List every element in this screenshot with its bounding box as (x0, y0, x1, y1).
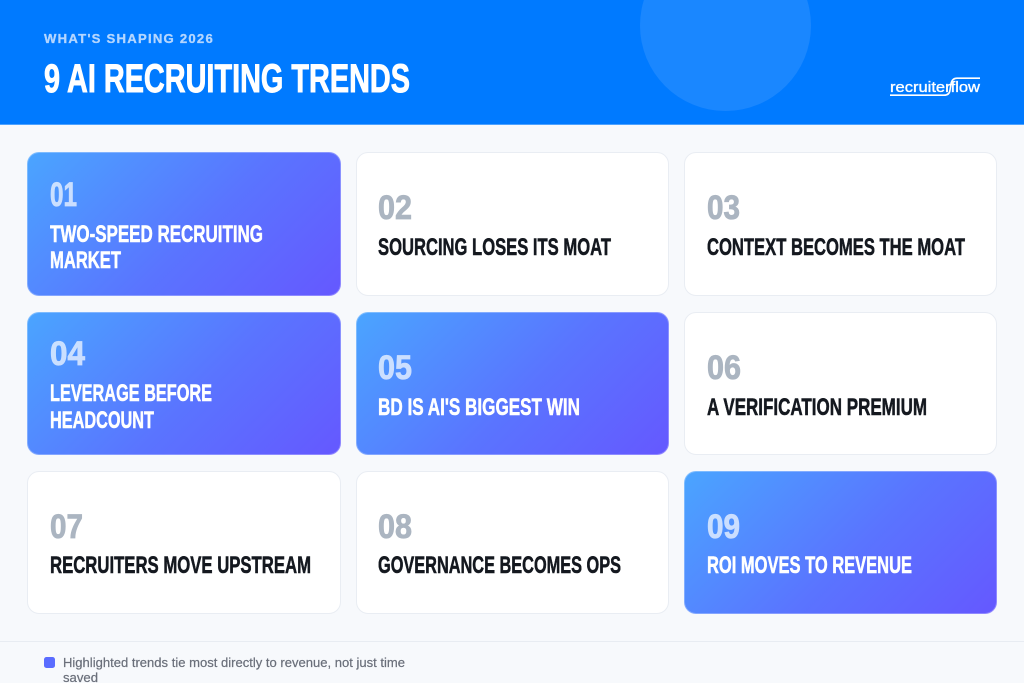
label: two-speed recruiting market: MARKET (50, 247, 121, 274)
number 03: 03 (707, 189, 740, 227)
number 05: 05 (378, 349, 412, 387)
label: leverage before headcount: LEVERAGE BEFORE (50, 380, 212, 407)
label: bd is ai's biggest win: BD IS AI'S BIGGEST WIN (378, 394, 580, 421)
header banner (0, 0, 1024, 125)
card 03 (684, 152, 997, 296)
card 08 (356, 471, 669, 614)
card 07 (27, 471, 341, 614)
card 04 (27, 312, 341, 455)
label: two-speed recruiting market (50, 221, 263, 274)
card 06 (684, 312, 997, 455)
label: roi moves to revenue: ROI MOVES TO REVENUE (707, 552, 912, 579)
card 01 (27, 152, 341, 296)
decorative circle (640, 0, 811, 111)
footer legend (0, 641, 1024, 683)
number 04: 04 (50, 335, 85, 373)
card 02 (356, 152, 669, 296)
legend text: Highlighted trends tie most directly to revenue, not just time (63, 656, 405, 670)
card 09 (684, 471, 997, 614)
legend swatch (44, 657, 55, 668)
number 08: 08 (378, 508, 412, 546)
label: leverage before headcount: HEADCOUNT (50, 407, 154, 434)
number 09: 09 (707, 508, 740, 546)
logo: recruiterflow: recruiterflow (890, 80, 981, 96)
number 02: 02 (378, 189, 412, 227)
label: leverage before headcount (50, 380, 212, 434)
card 05 (356, 312, 669, 455)
legend text (63, 656, 405, 683)
number 06: 06 (707, 349, 741, 387)
eyebrow: what's shaping 2026: WHAT'S SHAPING 2026 (44, 31, 214, 46)
number 01: 01 (50, 176, 77, 214)
number 07: 07 (50, 508, 83, 546)
title: 9 AI RECRUITING TRENDS (44, 57, 410, 101)
